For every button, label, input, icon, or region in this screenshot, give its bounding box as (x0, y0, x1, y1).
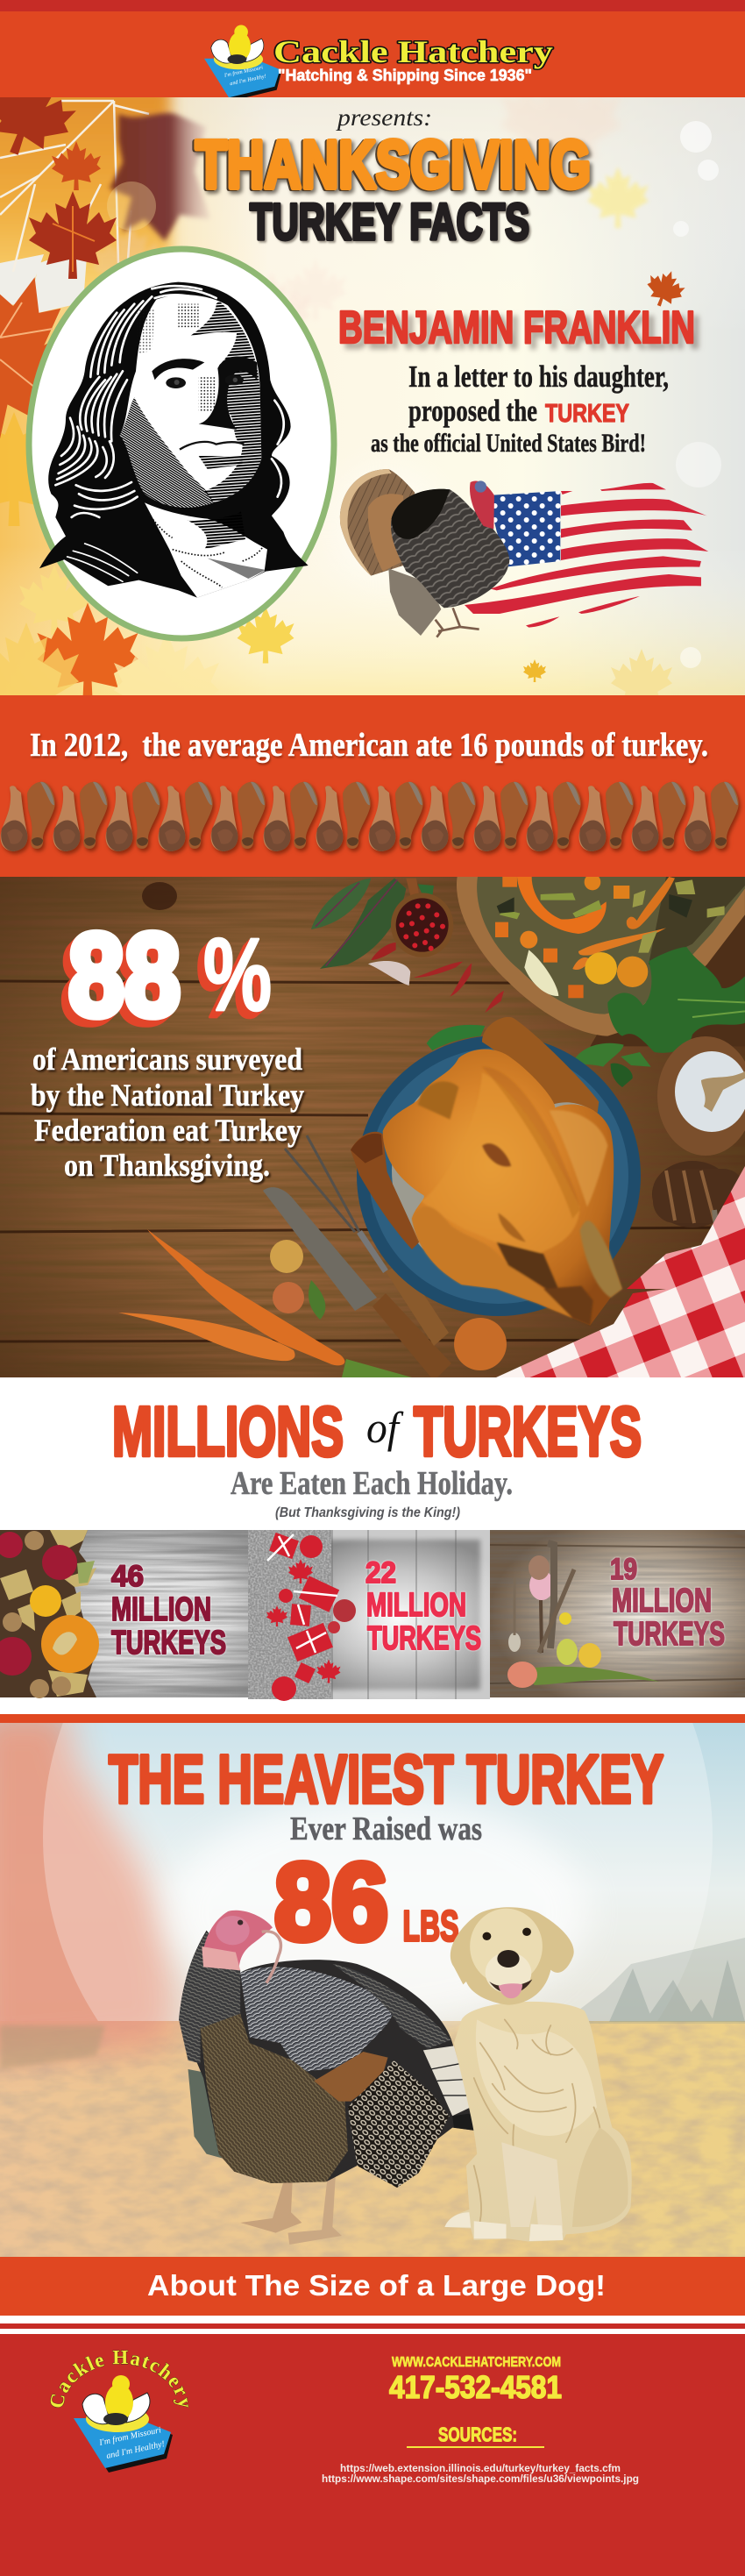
distressed flag (465, 483, 708, 628)
subheading: Ever Raised was (290, 1811, 482, 1847)
source links: https://www.shape.com/sites/shape.com/files/u36/viewpoints.jpg (322, 2473, 639, 2485)
onion (454, 1318, 507, 1370)
script word: of: of (366, 1403, 404, 1452)
label: 46 million turkeys: TURKEYS (111, 1625, 226, 1662)
brand name: Cackle Hatchery (273, 34, 553, 69)
plate (357, 1035, 641, 1316)
title: Turkey Facts: TURKEY FACTS (250, 194, 529, 251)
icon: chick on Missouri map (74, 2375, 173, 2473)
text block: Franklin proposal: TURKEY (545, 400, 629, 428)
label: 46 million turkeys: MILLION (111, 1591, 211, 1628)
label: 46 million turkeys (111, 1560, 226, 1662)
text block: survey statement: by the National Turkey (31, 1078, 304, 1113)
pale sun circle (43, 1723, 713, 2021)
roast turkey (351, 1017, 622, 1326)
checked napkin (496, 1166, 745, 1377)
icon row: turkey legs (1, 782, 739, 851)
icon: chick logo (204, 25, 281, 101)
big number: 88 percent: % (203, 917, 272, 1033)
panel: heaviest turkey (0, 1723, 745, 2257)
illustration: turkey with distressed American flag (340, 469, 708, 637)
parsley (427, 947, 745, 1087)
big number: 86: 86 (274, 1842, 388, 1963)
subheading: Are Eaten Each Holiday. (231, 1465, 513, 1502)
chard leaves (311, 879, 434, 969)
source links (322, 2462, 639, 2485)
panel: header bar (0, 0, 745, 101)
red peppercorn bowl (391, 879, 453, 957)
text block: survey statement: of Americans surveyed (32, 1042, 302, 1077)
divider line (0, 1714, 745, 1723)
big number: 88 percent: 88 (68, 910, 181, 1041)
panel: millions of turkeys (0, 1392, 745, 1701)
text block: Franklin proposal: as the official United States Bird! (371, 429, 646, 458)
illustration: golden retriever (444, 1907, 632, 2242)
portrait: Benjamin Franklin engraving (39, 282, 309, 598)
panel: footer (0, 2323, 745, 2576)
text block: Franklin proposal: In a letter to his daughter, (408, 359, 669, 394)
heading: millions: MILLIONS (112, 1392, 344, 1470)
text block: Franklin proposal (371, 359, 669, 458)
label: 22 million turkeys: MILLION (366, 1587, 466, 1624)
panel: wood table 88 percent (0, 874, 745, 1381)
autumn leaves background (0, 97, 721, 695)
eggs cutlery and tulip (507, 1543, 659, 1688)
website: WWW.CACKLEHATCHERY.COM (392, 2355, 561, 2370)
icon: chick on Missouri map: I'm from Missouri (97, 2425, 162, 2448)
footer logo (50, 2350, 189, 2473)
illustration: wild turkey (179, 1911, 475, 2245)
caption: About The Size of a Large Dog! (147, 2269, 606, 2302)
presents label: presents: (336, 104, 432, 131)
label: 46 million turkeys: 46 (111, 1560, 144, 1593)
unit: LBS: LBS (403, 1903, 459, 1950)
salt bowl (657, 1036, 745, 1156)
panel: hero Benjamin Franklin (0, 97, 745, 695)
footer logo: Cackle Hatchery (50, 2350, 189, 2408)
tagline: "Hatching & Shipping Since 1936" (278, 67, 532, 84)
table top right dish, greens and spices (311, 874, 745, 1087)
card: Thanksgiving 46 million (0, 1530, 248, 1698)
autumn tree (0, 1710, 175, 2060)
fruit border (0, 1530, 99, 1698)
panel: size of a large dog band (0, 2257, 745, 2316)
logo arc name (63, 2364, 179, 2409)
sources heading: SOURCES: (438, 2423, 517, 2446)
text block: survey statement (31, 1042, 304, 1183)
label: 19 million turkeys: MILLION (612, 1583, 712, 1619)
pepper mill (652, 1161, 740, 1228)
text block: survey statement: on Thanksgiving. (64, 1148, 270, 1183)
label: 22 million turkeys (365, 1556, 481, 1657)
phone number: 417-532-4581 (389, 2369, 562, 2405)
source links: https://web.extension.illinois.edu/turkey/turkey_facts.cfm (340, 2462, 621, 2474)
icon: chick on Missouri map: and I'm Healthy! (105, 2439, 166, 2461)
carrots and apples (118, 1229, 412, 1377)
label: 19 million turkeys: 19 (610, 1553, 637, 1586)
card: Easter 19 million (490, 1530, 745, 1697)
label: 22 million turkeys: TURKEYS (367, 1620, 481, 1657)
title: Thanksgiving: THANKSGIVING (195, 127, 591, 203)
big number: 88 percent (68, 910, 272, 1041)
card: Christmas 22 million (248, 1530, 490, 1701)
text block: Franklin proposal: proposed the (408, 394, 537, 428)
garlic and chilies (368, 943, 504, 1013)
fork and knife (263, 1135, 451, 1381)
note: (But Thanksgiving is the King!) (275, 1505, 460, 1520)
small turkey bird (340, 469, 509, 637)
dish (457, 874, 745, 1046)
label: 22 million turkeys: 22 (365, 1556, 396, 1590)
label: 19 million turkeys (610, 1553, 725, 1653)
text block: survey statement: Federation eat Turkey (34, 1113, 302, 1148)
portrait oval (29, 249, 334, 638)
heading: turkeys: TURKEYS (414, 1392, 642, 1470)
distant trees (580, 1938, 745, 2024)
panel: 16 pounds band (0, 695, 745, 877)
gifts and ornaments (266, 1533, 356, 1701)
icon: chick logo: and I'm Healthy! (230, 74, 266, 87)
icon: chick logo: I'm from Missouri (223, 65, 264, 79)
